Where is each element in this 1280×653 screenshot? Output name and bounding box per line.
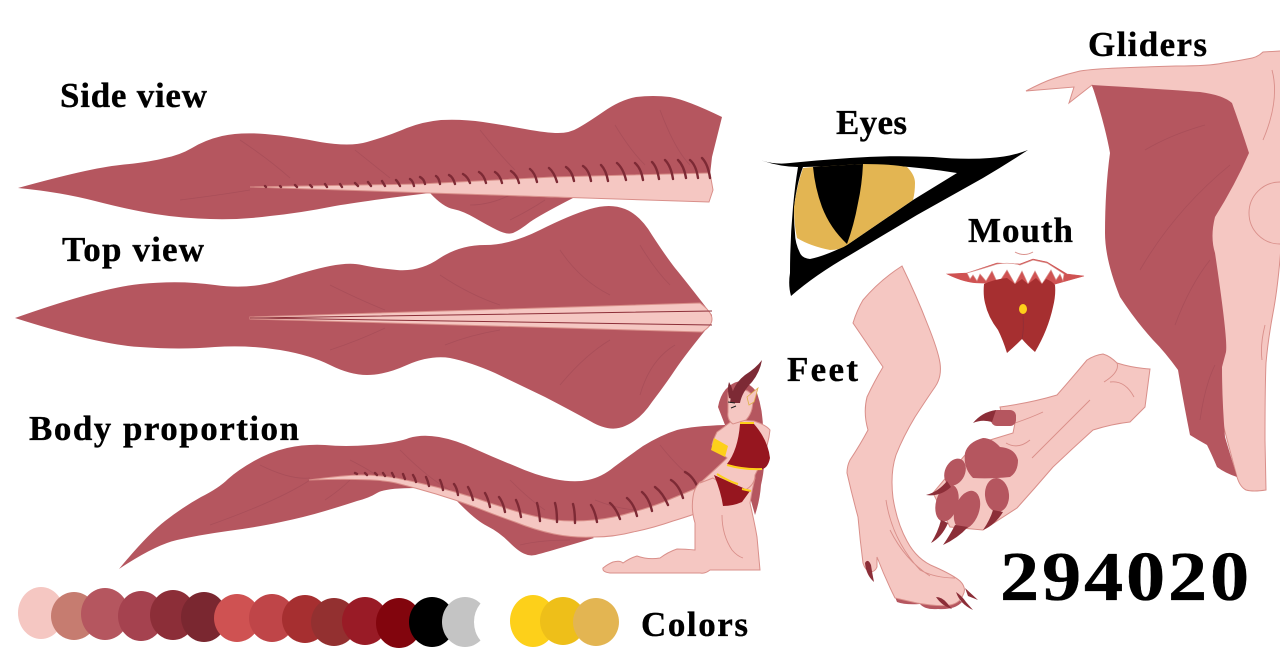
panel: paw underside [926,354,1150,545]
panel: body proportion figure with tail [119,360,770,573]
paw claws [926,410,1003,545]
foot claws [865,561,978,610]
head [728,389,753,424]
panel: side foot [847,266,978,610]
colour palette: yellows [510,595,619,647]
main pad [965,438,1018,478]
teeth [967,260,1064,284]
heading: Side view: Side view [60,76,208,115]
heading: Colors: Colors [641,605,748,644]
colour palette: reds [18,587,514,648]
tongue [984,278,1055,353]
heading: Feet: Feet [787,350,858,389]
panel: glider wing [1026,51,1280,491]
horns [728,360,762,403]
ID number: 294020 [1000,539,1252,616]
ear [747,388,758,405]
figure: kneeling character [603,360,770,573]
heading: Mouth: Mouth [968,211,1073,250]
pupil [813,164,863,244]
heading: Gliders: Gliders [1088,25,1207,64]
armband [711,438,728,457]
panel: eye illustration [760,150,1028,296]
top garment [727,424,770,469]
panel: mouth illustration [947,252,1084,353]
heading: Top view: Top view [62,230,205,269]
panel: top view dragon tail [15,206,712,429]
panel: side view dragon tail [18,96,722,234]
iris [794,164,915,250]
joint circle [1249,182,1280,244]
heading: Eyes: Eyes [836,103,907,142]
bottom garment [714,475,750,506]
toe pads [940,455,970,489]
heading: Body proportion: Body proportion [29,409,299,448]
